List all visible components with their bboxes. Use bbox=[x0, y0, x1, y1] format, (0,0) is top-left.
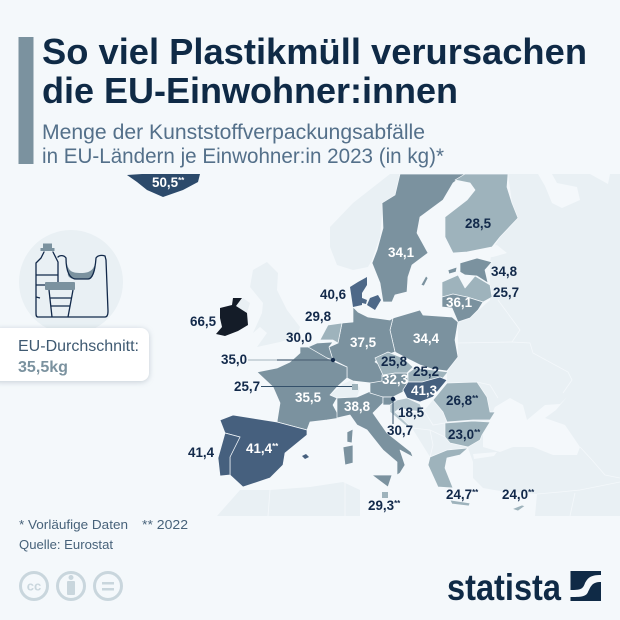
country values: 66,5 bbox=[190, 314, 217, 329]
country values: ** bbox=[474, 428, 481, 437]
country values: 38,8 bbox=[344, 399, 371, 414]
Slovakia bbox=[408, 368, 448, 382]
country values: 37,5 bbox=[350, 335, 377, 350]
country values: 35,5 bbox=[295, 390, 322, 405]
country values: 25,8 bbox=[381, 354, 408, 369]
non-EU land: east and Balkans bbox=[217, 174, 620, 516]
Cyprus bbox=[512, 505, 525, 511]
title: die EU-Einwohner:innen bbox=[42, 70, 458, 111]
country values: 24,7 bbox=[446, 487, 472, 502]
France bbox=[257, 347, 347, 430]
callout: EU average bbox=[0, 328, 149, 381]
country values: 34,4 bbox=[413, 331, 440, 346]
icon: bottle, cup and plastic bag bbox=[19, 230, 123, 334]
Bulgaria bbox=[445, 421, 490, 447]
leader line: Luxembourg bbox=[248, 358, 335, 362]
Belgium bbox=[308, 342, 333, 360]
Latvia bbox=[442, 275, 492, 302]
leader line: Slovenia bbox=[391, 397, 395, 424]
Romania bbox=[433, 382, 495, 422]
country values: 26,8 bbox=[446, 393, 472, 408]
title: So viel Plastikmüll verursachen bbox=[42, 31, 587, 72]
footnotes and source: ** 2022 bbox=[142, 517, 188, 532]
country values bbox=[152, 175, 535, 513]
seas bbox=[473, 174, 610, 459]
country values: 24,0 bbox=[502, 487, 528, 502]
country values: ** bbox=[394, 499, 401, 508]
Portugal bbox=[218, 433, 240, 476]
Slovenia bbox=[383, 397, 397, 405]
title bbox=[42, 31, 587, 111]
Czechia bbox=[375, 352, 413, 375]
country values: 28,5 bbox=[465, 216, 492, 231]
Hungary bbox=[403, 377, 447, 402]
country values: 30,7 bbox=[387, 423, 413, 438]
leader line: Liechtenstein bbox=[261, 386, 352, 388]
country values: ** bbox=[528, 488, 535, 497]
subtitle: in EU-Ländern je Einwohner:in 2023 (in kg)* bbox=[42, 145, 444, 168]
Liechtenstein marker bbox=[352, 384, 358, 390]
country values: ** bbox=[472, 394, 479, 403]
Italy bbox=[337, 390, 413, 487]
map of Europe bbox=[127, 174, 620, 516]
Lithuania bbox=[442, 294, 483, 322]
Denmark bbox=[350, 277, 381, 310]
Finland bbox=[445, 174, 518, 253]
country values: 25,7 bbox=[234, 379, 260, 394]
callout: EU average: EU-Durchschnitt: bbox=[18, 338, 139, 355]
non-EU borders bbox=[268, 300, 620, 516]
country values: 40,6 bbox=[320, 287, 346, 302]
Estonia bbox=[448, 258, 492, 283]
Austria bbox=[370, 373, 408, 397]
country values: 29,8 bbox=[305, 309, 332, 324]
Croatia bbox=[390, 398, 423, 428]
country values: 25,7 bbox=[493, 285, 519, 300]
country values: ** bbox=[272, 442, 279, 451]
callout: EU average: 35,5kg bbox=[18, 359, 68, 376]
country values: 35,0 bbox=[221, 352, 247, 367]
country values: ** bbox=[178, 176, 185, 185]
Balearic Islands bbox=[302, 454, 309, 459]
subtitle bbox=[42, 121, 444, 168]
country values: 34,8 bbox=[491, 264, 518, 279]
country values: 29,3 bbox=[368, 498, 394, 513]
footnotes and source bbox=[19, 517, 188, 552]
Netherlands bbox=[320, 323, 342, 343]
Malta marker bbox=[382, 492, 388, 498]
country values: 34,1 bbox=[388, 245, 415, 260]
country values: 41,3 bbox=[411, 383, 437, 398]
Germany bbox=[329, 307, 395, 384]
footnotes and source: * Vorläufige Daten bbox=[19, 517, 128, 532]
country values: 23,0 bbox=[448, 427, 474, 442]
country values: 41,4 bbox=[188, 445, 215, 460]
statista logo: statista bbox=[447, 567, 561, 608]
country values: ** bbox=[472, 488, 479, 497]
subtitle: Menge der Kunststoffverpackungsabfälle bbox=[42, 121, 425, 144]
footnotes and source: Quelle: Eurostat bbox=[19, 537, 113, 552]
country values: 32,3 bbox=[382, 372, 408, 387]
country values: 18,5 bbox=[398, 405, 425, 420]
Poland bbox=[390, 310, 458, 371]
Sweden bbox=[372, 174, 465, 302]
country values: 25,2 bbox=[413, 364, 439, 379]
icon: creative commons licence: cc bbox=[27, 578, 41, 594]
country values: 30,0 bbox=[286, 330, 312, 345]
title accent bar bbox=[18, 37, 34, 164]
country values: 50,5 bbox=[152, 175, 178, 190]
icon: creative commons licence bbox=[20, 572, 122, 600]
Iceland bbox=[127, 174, 200, 197]
country values: 41,4 bbox=[246, 441, 272, 456]
country values: 36,1 bbox=[446, 295, 473, 310]
Spain bbox=[220, 415, 307, 487]
Ireland bbox=[216, 298, 248, 336]
Greece bbox=[428, 448, 470, 506]
